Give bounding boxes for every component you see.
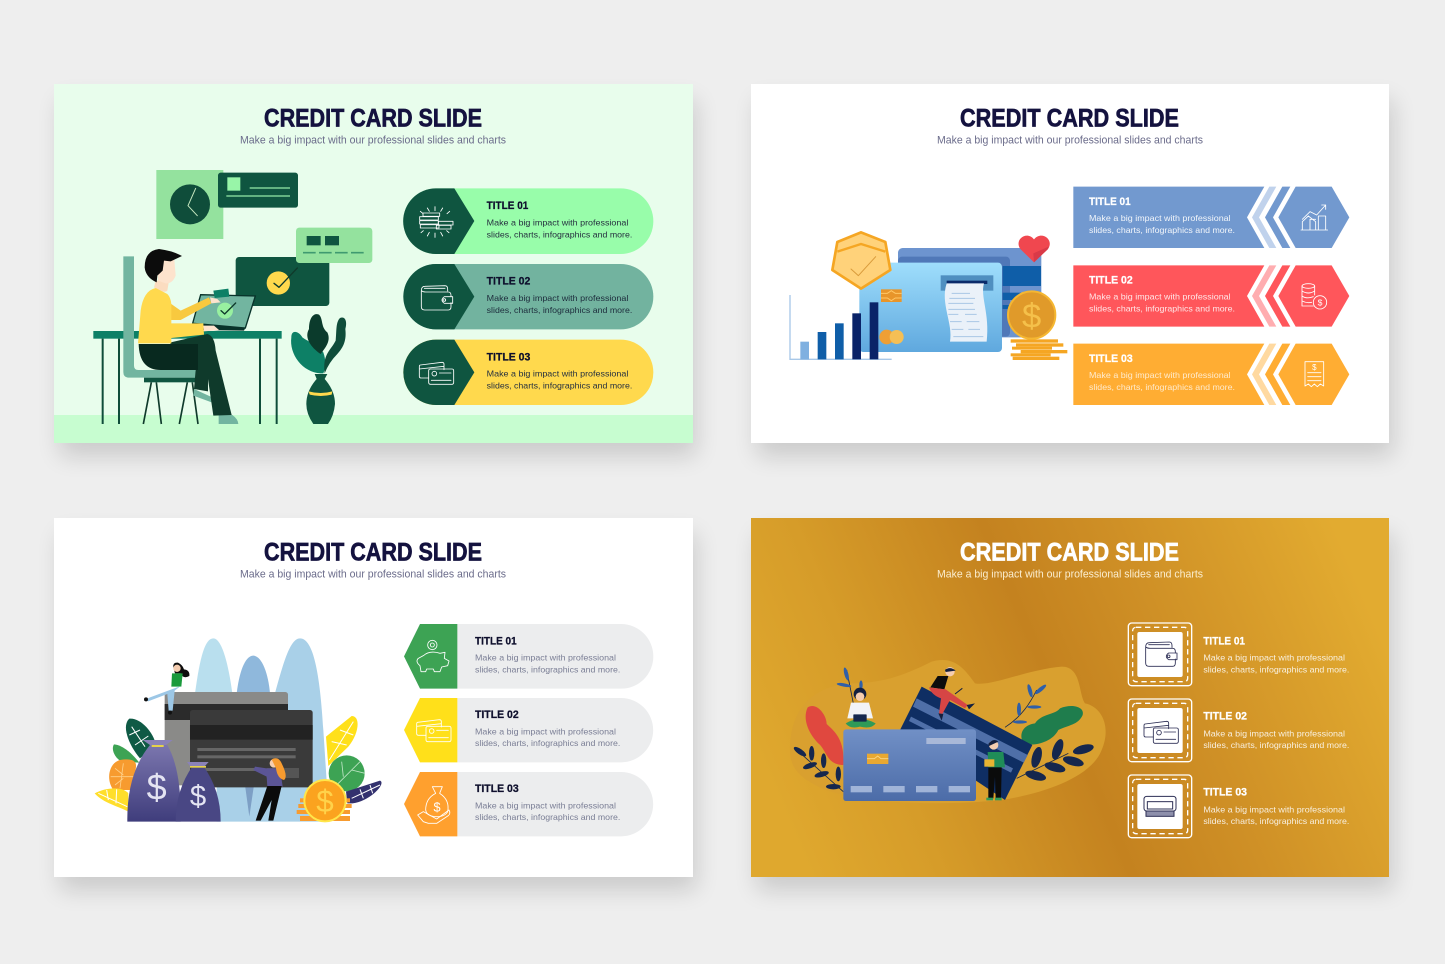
back grey card — [165, 692, 288, 785]
row 03: TITLE 03 — [1203, 787, 1247, 799]
row 01: TITLE 01 — [487, 200, 528, 212]
row 02: TITLE 02 — [475, 709, 519, 721]
row 01: Make a big impact with professional — [1203, 653, 1345, 663]
icon: growth chart — [1301, 205, 1328, 230]
row 02 — [404, 698, 653, 762]
row 01 — [1128, 623, 1349, 686]
person — [138, 249, 238, 424]
row 01 — [403, 188, 653, 254]
front card — [859, 263, 1002, 352]
title: CREDIT CARD SLIDE — [960, 538, 1179, 566]
icon: credit cards — [419, 362, 454, 384]
receipt — [945, 283, 987, 342]
row 02: Make a big impact with professional — [1089, 292, 1231, 302]
row 01 — [1073, 187, 1349, 248]
front dark card — [190, 710, 313, 787]
row 01: Make a big impact with professional — [1089, 213, 1231, 223]
row 03: slides, charts, infographics and more. — [475, 812, 620, 822]
row 03: Make a big impact with professional — [1089, 370, 1231, 380]
potted plant — [291, 314, 346, 424]
background peaks — [195, 638, 329, 822]
icon: coins: $ — [1318, 298, 1323, 308]
money bags: $ — [190, 780, 206, 813]
panel: green slide — [54, 84, 693, 443]
row 03: slides, charts, infographics and more. — [1089, 382, 1235, 392]
icon: cash dispenser — [1144, 796, 1176, 816]
row 03: TITLE 03 — [1089, 353, 1133, 365]
row 03 — [1073, 344, 1349, 405]
row 03 — [404, 772, 653, 836]
row 02: Make a big impact with professional — [1203, 728, 1345, 738]
person seated on card with laptop — [846, 688, 876, 727]
icon: coin and stack — [297, 780, 352, 821]
row 01: TITLE 01 — [475, 635, 517, 647]
row 03 — [403, 340, 653, 405]
person standing with tablet — [984, 740, 1005, 800]
subtitle: Make a big impact with our professional slides and charts — [240, 134, 506, 146]
icon: money stacks — [420, 207, 453, 237]
row 02: slides, charts, infographics and more. — [475, 738, 620, 748]
row 01: TITLE 01 — [1203, 635, 1245, 647]
front card — [843, 729, 976, 801]
row 03: Make a big impact with professional — [487, 369, 628, 379]
illustration: cards, money bags, people and leaves — [95, 638, 382, 822]
row 02: Make a big impact with professional — [475, 726, 616, 736]
row 01: slides, charts, infographics and more. — [475, 664, 620, 674]
person seated on top of card — [929, 667, 975, 721]
row 02: Make a big impact with professional — [487, 293, 628, 303]
row 01: slides, charts, infographics and more. — [487, 229, 632, 239]
icon: money bag in hand: $ — [433, 801, 441, 815]
row 01 — [404, 624, 653, 689]
person standing — [253, 758, 286, 821]
illustration: person paying online at desk — [93, 170, 372, 424]
row 02: slides, charts, infographics and more. — [1089, 304, 1235, 314]
row 03 — [1128, 775, 1349, 838]
money bags: $ — [147, 766, 167, 807]
card: payment check screen — [236, 257, 329, 306]
row 02: TITLE 02 — [1203, 711, 1247, 723]
background blob — [790, 660, 1106, 803]
icon: credit cards — [417, 720, 451, 742]
subtitle: Make a big impact with our professional slides and charts — [937, 134, 1203, 146]
laptop — [193, 295, 255, 331]
row 02 — [1128, 699, 1349, 762]
icon: clock tile — [156, 170, 223, 239]
plants — [792, 667, 1095, 792]
icon: piggy bank — [417, 640, 449, 672]
row 01: TITLE 01 — [1089, 196, 1131, 208]
row 02: slides, charts, infographics and more. — [1203, 740, 1349, 750]
back card — [898, 248, 1041, 337]
row 02: TITLE 02 — [1089, 275, 1133, 287]
panel: white slide with chevrons — [751, 84, 1389, 443]
icon: coin and stack: $ — [1022, 297, 1041, 335]
row 02: slides, charts, infographics and more. — [487, 305, 632, 315]
row 02 — [403, 264, 653, 329]
person seated on card — [144, 663, 189, 715]
row 01: slides, charts, infographics and more. — [1089, 225, 1235, 235]
row 03: Make a big impact with professional — [475, 800, 616, 810]
title: CREDIT CARD SLIDE — [264, 104, 482, 132]
title: CREDIT CARD SLIDE — [264, 538, 482, 566]
icon: coins — [1302, 284, 1327, 309]
desk — [93, 331, 282, 424]
icon: wallet — [1146, 642, 1177, 666]
leaves — [95, 716, 382, 812]
bar chart — [790, 295, 892, 359]
icon: shield — [832, 232, 890, 289]
illustration: credit cards with people and plants — [790, 660, 1106, 803]
card: green info card — [296, 228, 372, 263]
subtitle: Make a big impact with our professional slides and charts — [937, 568, 1203, 580]
list: three hexagon rows — [404, 624, 653, 836]
subtitle: Make a big impact with our professional slides and charts — [240, 568, 506, 580]
icon: money bag in hand — [418, 787, 450, 823]
illustration: card, receipt, coin and bars — [790, 232, 1067, 360]
money bags — [127, 740, 221, 822]
icon: receipt: $ — [1312, 363, 1317, 372]
row 03: TITLE 03 — [487, 351, 530, 363]
panel: gold slide — [751, 518, 1389, 877]
row 01: slides, charts, infographics and more. — [1203, 664, 1349, 674]
icon: heart — [1019, 236, 1050, 262]
panel: white slide with hexagon tabs — [54, 518, 693, 877]
row 03: slides, charts, infographics and more. — [487, 381, 632, 391]
icon: coin and stack — [1008, 291, 1067, 360]
list: three chevron rows — [1073, 187, 1349, 405]
icon: receipt — [1305, 362, 1324, 387]
row 01: Make a big impact with professional — [475, 653, 616, 663]
card: dark info card — [218, 173, 298, 208]
icon: coin and stack: $ — [316, 784, 334, 819]
chair — [123, 256, 198, 424]
row 03: slides, charts, infographics and more. — [1203, 816, 1349, 826]
title: CREDIT CARD SLIDE — [960, 104, 1179, 132]
list: three icon tile rows — [1128, 623, 1349, 838]
icon: wallet — [421, 286, 453, 310]
row 01: Make a big impact with professional — [487, 217, 628, 227]
row 03: Make a big impact with professional — [1203, 804, 1345, 814]
row 02: TITLE 02 — [487, 276, 530, 288]
icon: credit cards — [1144, 721, 1178, 743]
row 02 — [1073, 265, 1349, 327]
list: three pill rows — [403, 188, 653, 405]
back dark card — [900, 687, 1032, 800]
row 03: TITLE 03 — [475, 783, 519, 795]
